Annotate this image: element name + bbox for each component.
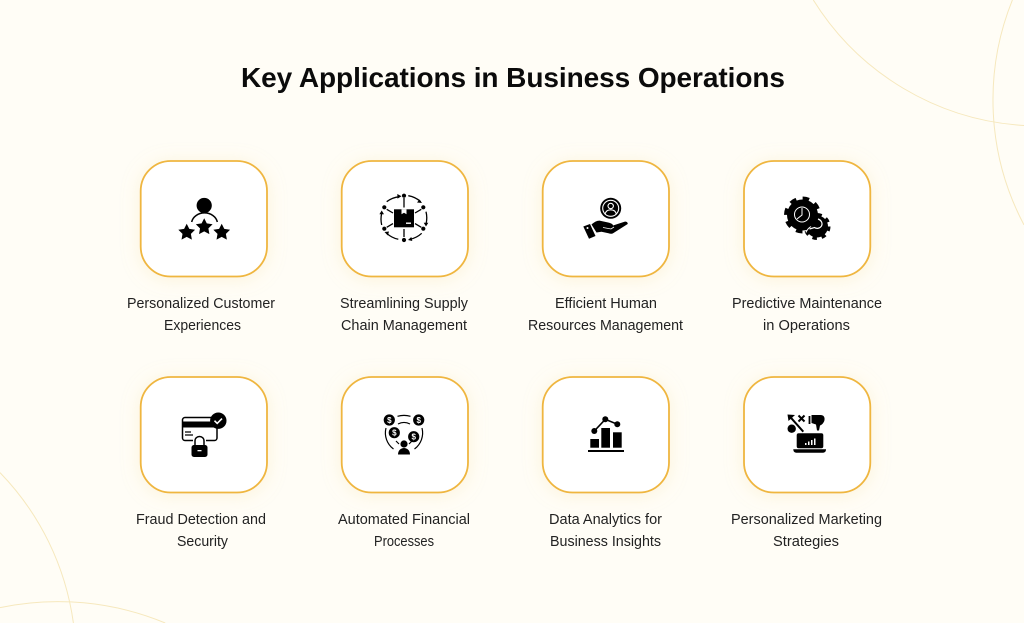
label — [127, 296, 275, 334]
label — [528, 296, 683, 334]
label: in Operations — [763, 318, 850, 334]
icon: person with money — [384, 414, 424, 454]
label: Personalized Marketing — [731, 512, 882, 528]
label — [340, 296, 469, 334]
title: Key Applications in Business Operations — [241, 62, 785, 93]
label: Data Analytics for — [549, 512, 662, 528]
label: Chain Management — [341, 318, 467, 334]
panel: fraud detection and security — [136, 377, 267, 550]
label: Personalized Customer — [127, 296, 275, 312]
icon: person with money: $ — [411, 433, 416, 442]
panel: automated financial processes — [338, 377, 470, 550]
panel: efficient human resources management — [528, 161, 683, 334]
label: Automated Financial — [338, 512, 470, 528]
label — [732, 296, 882, 334]
panel: personalized marketing — [731, 377, 882, 550]
icon: laptop with strategy and megaphone — [788, 414, 826, 453]
label: Business Insights — [550, 534, 661, 550]
label: Efficient Human — [555, 296, 657, 312]
label: Streamlining Supply — [340, 296, 469, 312]
icon: bar chart with line — [588, 416, 624, 452]
icon: person with money: $ — [416, 416, 421, 425]
panel: data analytics — [543, 377, 669, 550]
label — [136, 512, 266, 550]
label — [338, 512, 470, 550]
label: Security — [177, 534, 229, 550]
icon: person with money: $ — [387, 416, 392, 425]
icon: credit card with lock — [182, 412, 226, 457]
panel: predictive maintenance — [732, 161, 882, 334]
label: Experiences — [164, 318, 241, 334]
label: Processes — [374, 534, 434, 550]
icon: person with money: $ — [392, 429, 397, 438]
label: Resources Management — [528, 318, 683, 334]
label: Strategies — [773, 534, 839, 550]
label: Predictive Maintenance — [732, 296, 882, 312]
panel: streamlining supply chain management — [340, 161, 469, 334]
label: Fraud Detection and — [136, 512, 266, 528]
icon: hand holding person — [583, 198, 628, 239]
icon: package cycle — [379, 194, 428, 242]
label — [549, 512, 662, 550]
icon: person with stars — [178, 198, 230, 240]
panel: personalized customer experiences — [127, 161, 275, 334]
label — [731, 512, 882, 550]
icon: gears with clock — [786, 198, 829, 238]
